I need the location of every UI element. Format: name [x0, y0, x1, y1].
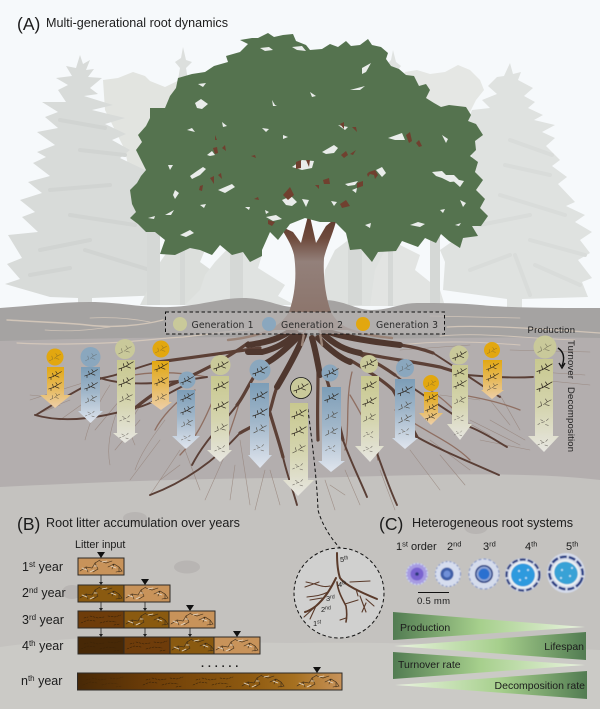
transfer arrows: [101, 575, 190, 636]
inset: root orders: [294, 548, 384, 638]
cross-section 3rd order: [468, 558, 500, 590]
fir tree left: [5, 55, 165, 303]
canopy foliage: [130, 33, 488, 262]
light brown roots: [120, 372, 520, 460]
row labels: 3: [22, 613, 29, 627]
legend: generation 1: [173, 317, 254, 331]
third soil layer: [0, 474, 600, 709]
legend: generation 3: Generation 3: [376, 320, 438, 331]
root order headings: 2: [447, 541, 453, 553]
arrow: generation 3 b: [150, 340, 172, 410]
generation arrows: [40, 336, 559, 496]
arrow: generation 1 b: [207, 355, 232, 462]
panel title B: Root litter accumulation over years: [46, 516, 240, 530]
root order headings: 1: [396, 541, 402, 553]
background forest: [5, 47, 592, 308]
order labels: rd: [330, 594, 335, 600]
panel B: litter accumulation: [17, 514, 342, 690]
root order headings: st: [402, 540, 409, 548]
background broadleaf tree left: [103, 72, 200, 240]
order labels: th: [342, 580, 347, 586]
root order headings: rd: [489, 540, 496, 548]
wedge: lifespan: Lifespan: [544, 641, 584, 653]
lower fir left centre: [140, 235, 235, 305]
order labels: 1: [313, 619, 317, 628]
lowest soil layer: [0, 638, 600, 709]
panel title C: (C): [379, 514, 403, 534]
arrow: reference generation 1: [528, 336, 559, 452]
soil patches: [62, 512, 488, 599]
root crown: [248, 330, 400, 387]
order labels: 3: [326, 594, 330, 603]
cross-section 5th order: [543, 551, 589, 595]
scale bar: 0.5 mm: [417, 596, 450, 607]
order labels: 2: [321, 605, 325, 614]
order labels: th: [344, 556, 349, 562]
panel title A: (A): [17, 14, 40, 34]
curved turnover arrow: [558, 348, 565, 368]
row labels: [21, 560, 66, 688]
panel title C: [379, 514, 573, 534]
thick roots: [135, 343, 467, 457]
root order headings: th: [572, 540, 578, 548]
root order headings: 3: [483, 541, 489, 553]
order labels: 5: [340, 555, 344, 564]
row labels: year: [35, 674, 62, 688]
row labels: nd: [29, 586, 38, 595]
process labels: [528, 325, 576, 452]
root order headings: 5: [566, 541, 572, 553]
wedge: turnover rate: Turnover rate: [398, 659, 461, 671]
spire right: [385, 50, 401, 82]
lower fir centre: [185, 240, 295, 305]
visible branches: [199, 122, 422, 226]
wedge: turnover rate: [393, 652, 585, 679]
legend: generation 2: [262, 317, 343, 331]
root order headings: [396, 540, 578, 553]
row labels: year: [35, 560, 63, 574]
dashed leader to inset: [307, 403, 340, 548]
ground layers: [0, 298, 600, 709]
label: turnover: Turnover: [565, 340, 576, 379]
panel title A: Multi-generational root dynamics: [46, 16, 228, 30]
branching root diagram: [304, 553, 377, 622]
medium roots: [35, 353, 533, 505]
inset circle: [294, 548, 384, 638]
wedge: production: Production: [400, 622, 450, 634]
transfer arrowheads: [99, 582, 192, 637]
cross-section 2nd order: [435, 561, 461, 587]
second soil layer: [0, 337, 600, 500]
arrow: generation 2 b: [172, 372, 200, 449]
root order headings: th: [531, 540, 537, 548]
arrow: generation 3 a: [40, 348, 71, 408]
lower fir right centre: [320, 235, 420, 306]
row labels: 2: [22, 586, 29, 600]
panel C: heterogeneous roots: [379, 514, 589, 699]
row 3rd year: [78, 611, 215, 628]
continuation dots: ......: [201, 658, 242, 670]
panel title A: [17, 14, 228, 34]
fir tree right shading: [470, 140, 585, 295]
row 2nd year: [78, 585, 170, 602]
row 4th year: [78, 637, 260, 654]
legend: generation 2: Generation 2: [281, 320, 343, 331]
label: production: Production: [528, 325, 575, 336]
wedge: decomposition rate: [395, 671, 587, 699]
cross-section 4th order: [505, 558, 541, 592]
background broadleaf tree right: [390, 65, 490, 235]
legend frame: [166, 312, 444, 334]
arrow: generation 2 c: [248, 360, 272, 468]
panel title B: (B): [17, 514, 40, 534]
arrow: generation 1 d: [447, 346, 472, 440]
order labels: 4: [338, 580, 342, 589]
arrow: generation 2 d: [318, 364, 345, 472]
label: decomposition: Decomposition: [565, 387, 576, 452]
row labels: st: [29, 560, 36, 569]
arrow: generation 1 c: [355, 355, 384, 462]
row labels: 4: [22, 639, 29, 653]
row labels: rd: [29, 613, 36, 622]
row 1st year: [78, 558, 124, 575]
row labels: year: [36, 639, 63, 653]
legend: generation 3: [356, 317, 438, 331]
arrow: generation 1 a: [113, 339, 138, 443]
trunk flare highlights: [228, 322, 392, 345]
input markers: [97, 552, 321, 673]
arrow: generation 2 a: [78, 347, 103, 423]
litter input label: Litter input: [75, 539, 125, 551]
order labels: st: [317, 620, 322, 626]
row nth year: [78, 673, 342, 690]
fine root tips: [30, 345, 590, 510]
arrow: generation 3 d: [481, 342, 504, 399]
wedge: lifespan: [394, 632, 586, 660]
fir tree right: [440, 63, 592, 308]
spire left: [175, 47, 192, 80]
topsoil band: [0, 298, 600, 420]
row labels: 1: [22, 560, 29, 574]
arrow: highlighted generation 1: [283, 378, 314, 496]
arrow: generation 2 e: [392, 359, 418, 449]
row labels: th: [29, 639, 36, 648]
wedge: decomposition rate: Decomposition rate: [495, 680, 585, 692]
tree canopy: [130, 33, 488, 262]
wedge: production: [393, 612, 585, 640]
root order headings: 4: [525, 541, 531, 553]
fir tree left shading: [30, 120, 150, 275]
panel title B: [17, 514, 240, 534]
order labels: nd: [325, 606, 331, 612]
cross-section 1st order: [406, 563, 428, 585]
panel title C: Heterogeneous root systems: [412, 516, 573, 530]
row labels: n: [21, 674, 28, 688]
root order headings: nd: [453, 540, 461, 548]
row labels: year: [36, 613, 64, 627]
tree trunk: [268, 212, 352, 330]
row labels: th: [28, 674, 35, 683]
order labels: [313, 555, 349, 628]
lower fir far right centre: [370, 240, 445, 306]
background trunks: [147, 225, 440, 306]
canopy gaps: [148, 46, 466, 237]
row labels: year: [38, 586, 66, 600]
legend box: [166, 312, 444, 334]
root system: [30, 322, 590, 510]
legend: generation 1: Generation 1: [192, 320, 254, 331]
root order headings: order: [408, 541, 437, 553]
pale surface roots: [7, 316, 600, 345]
arrow: generation 3 c: [419, 375, 443, 425]
